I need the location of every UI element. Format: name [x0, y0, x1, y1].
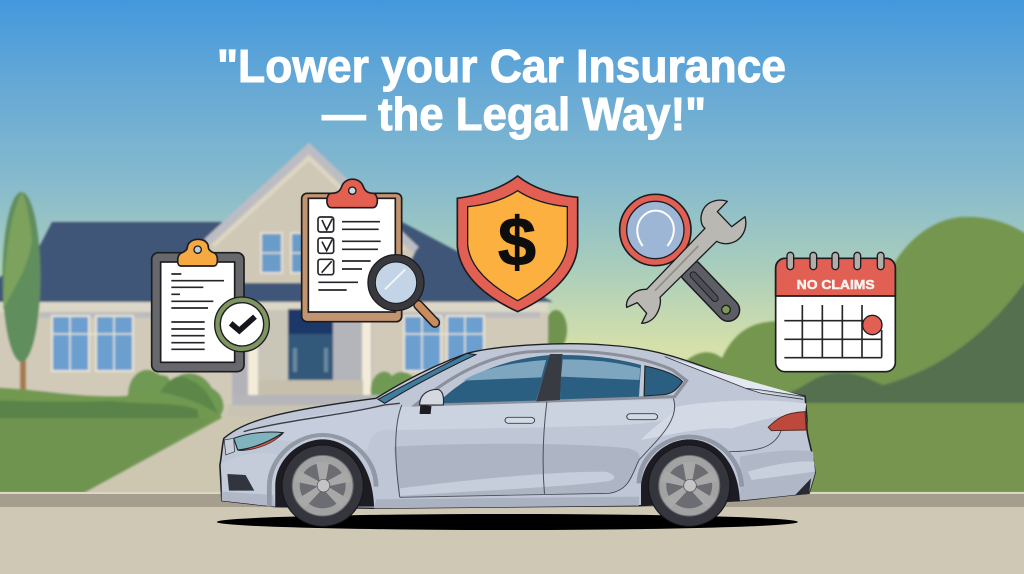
- title: "Lower your Car Insurance: [217, 40, 786, 92]
- checklist clip: [327, 179, 377, 208]
- hood crease: [244, 403, 400, 432]
- checklist board: [302, 193, 402, 322]
- magnifier lens: [368, 255, 424, 311]
- calendar label: NO CLAIMS: [797, 278, 875, 292]
- clipboard board: [152, 253, 244, 372]
- porch shrub: [371, 371, 420, 395]
- driveway and forecourt: [84, 395, 800, 493]
- front door: [288, 309, 333, 380]
- check boxes: [318, 217, 334, 275]
- left lawn: [0, 387, 222, 493]
- house: [0, 143, 567, 417]
- main roof: [0, 222, 553, 302]
- magnifier glass: [627, 201, 684, 259]
- door handles: [505, 414, 658, 423]
- road: [0, 492, 1024, 574]
- icon: magnifier and crossed wrenches: [620, 194, 746, 323]
- front shrub: [128, 370, 224, 418]
- icon: checklist clipboard with magnifier: [302, 179, 435, 323]
- gable: [206, 143, 416, 283]
- dark wrench: [692, 272, 730, 314]
- tail light: [768, 412, 806, 431]
- silver wrench: [626, 200, 746, 323]
- lower body shading: [394, 444, 640, 497]
- roof trim: [416, 351, 686, 405]
- car body: [220, 344, 815, 508]
- upper body highlight: [396, 399, 677, 430]
- checklist paper: [308, 198, 395, 312]
- front wheel: [282, 445, 363, 526]
- calendar header: [776, 258, 895, 296]
- wall trim: [0, 302, 548, 312]
- rear wheel: [648, 445, 730, 526]
- magnifier handle: [418, 305, 435, 323]
- icon: clipboard with checkmark badge: [152, 239, 269, 372]
- icon: shield with dollar sign: [457, 176, 578, 312]
- side shrub: [545, 310, 567, 350]
- windshield: [378, 353, 476, 403]
- shield inner: [468, 191, 567, 301]
- side mirror: [420, 389, 444, 414]
- calendar grid: [784, 305, 882, 358]
- porch: [232, 310, 372, 395]
- document text lines: [171, 274, 224, 349]
- spoiler edge: [665, 357, 805, 399]
- calendar page: [776, 258, 895, 372]
- rear side window: [560, 355, 641, 399]
- sky background: [0, 0, 1024, 403]
- background scenery: hills, house, lawn and road: [0, 143, 1024, 493]
- front grille: [227, 474, 254, 491]
- approval badge: [215, 297, 269, 352]
- wheel arches: [269, 435, 742, 507]
- clipboard clip: [178, 239, 217, 266]
- dollar sign: $: [498, 204, 536, 280]
- door pillar: [536, 354, 563, 401]
- icon: no claims calendar: [776, 252, 895, 372]
- marked date: [863, 315, 882, 335]
- door seams: [396, 398, 675, 497]
- shield outer: [457, 176, 578, 312]
- lower windows: [52, 316, 484, 371]
- calendar rings: [787, 252, 884, 270]
- right hills: [680, 217, 1024, 410]
- magnifier ring: [620, 194, 691, 266]
- clipboard paper: [161, 262, 235, 362]
- left tree: [2, 192, 40, 390]
- rear quarter window: [644, 366, 683, 396]
- upper windows: [261, 233, 311, 273]
- house wall: [0, 302, 548, 404]
- headlight: [224, 432, 283, 455]
- rear diffuser: [795, 478, 811, 495]
- ground shadow: [217, 514, 798, 530]
- title: — the Legal Way!": [322, 88, 706, 140]
- checklist text lines: [318, 222, 381, 290]
- front side window: [437, 355, 550, 403]
- porch steps: [258, 380, 363, 395]
- car: [217, 344, 815, 530]
- title: [217, 40, 786, 140]
- right lawn: [560, 403, 1024, 493]
- porch roof band: [231, 283, 403, 302]
